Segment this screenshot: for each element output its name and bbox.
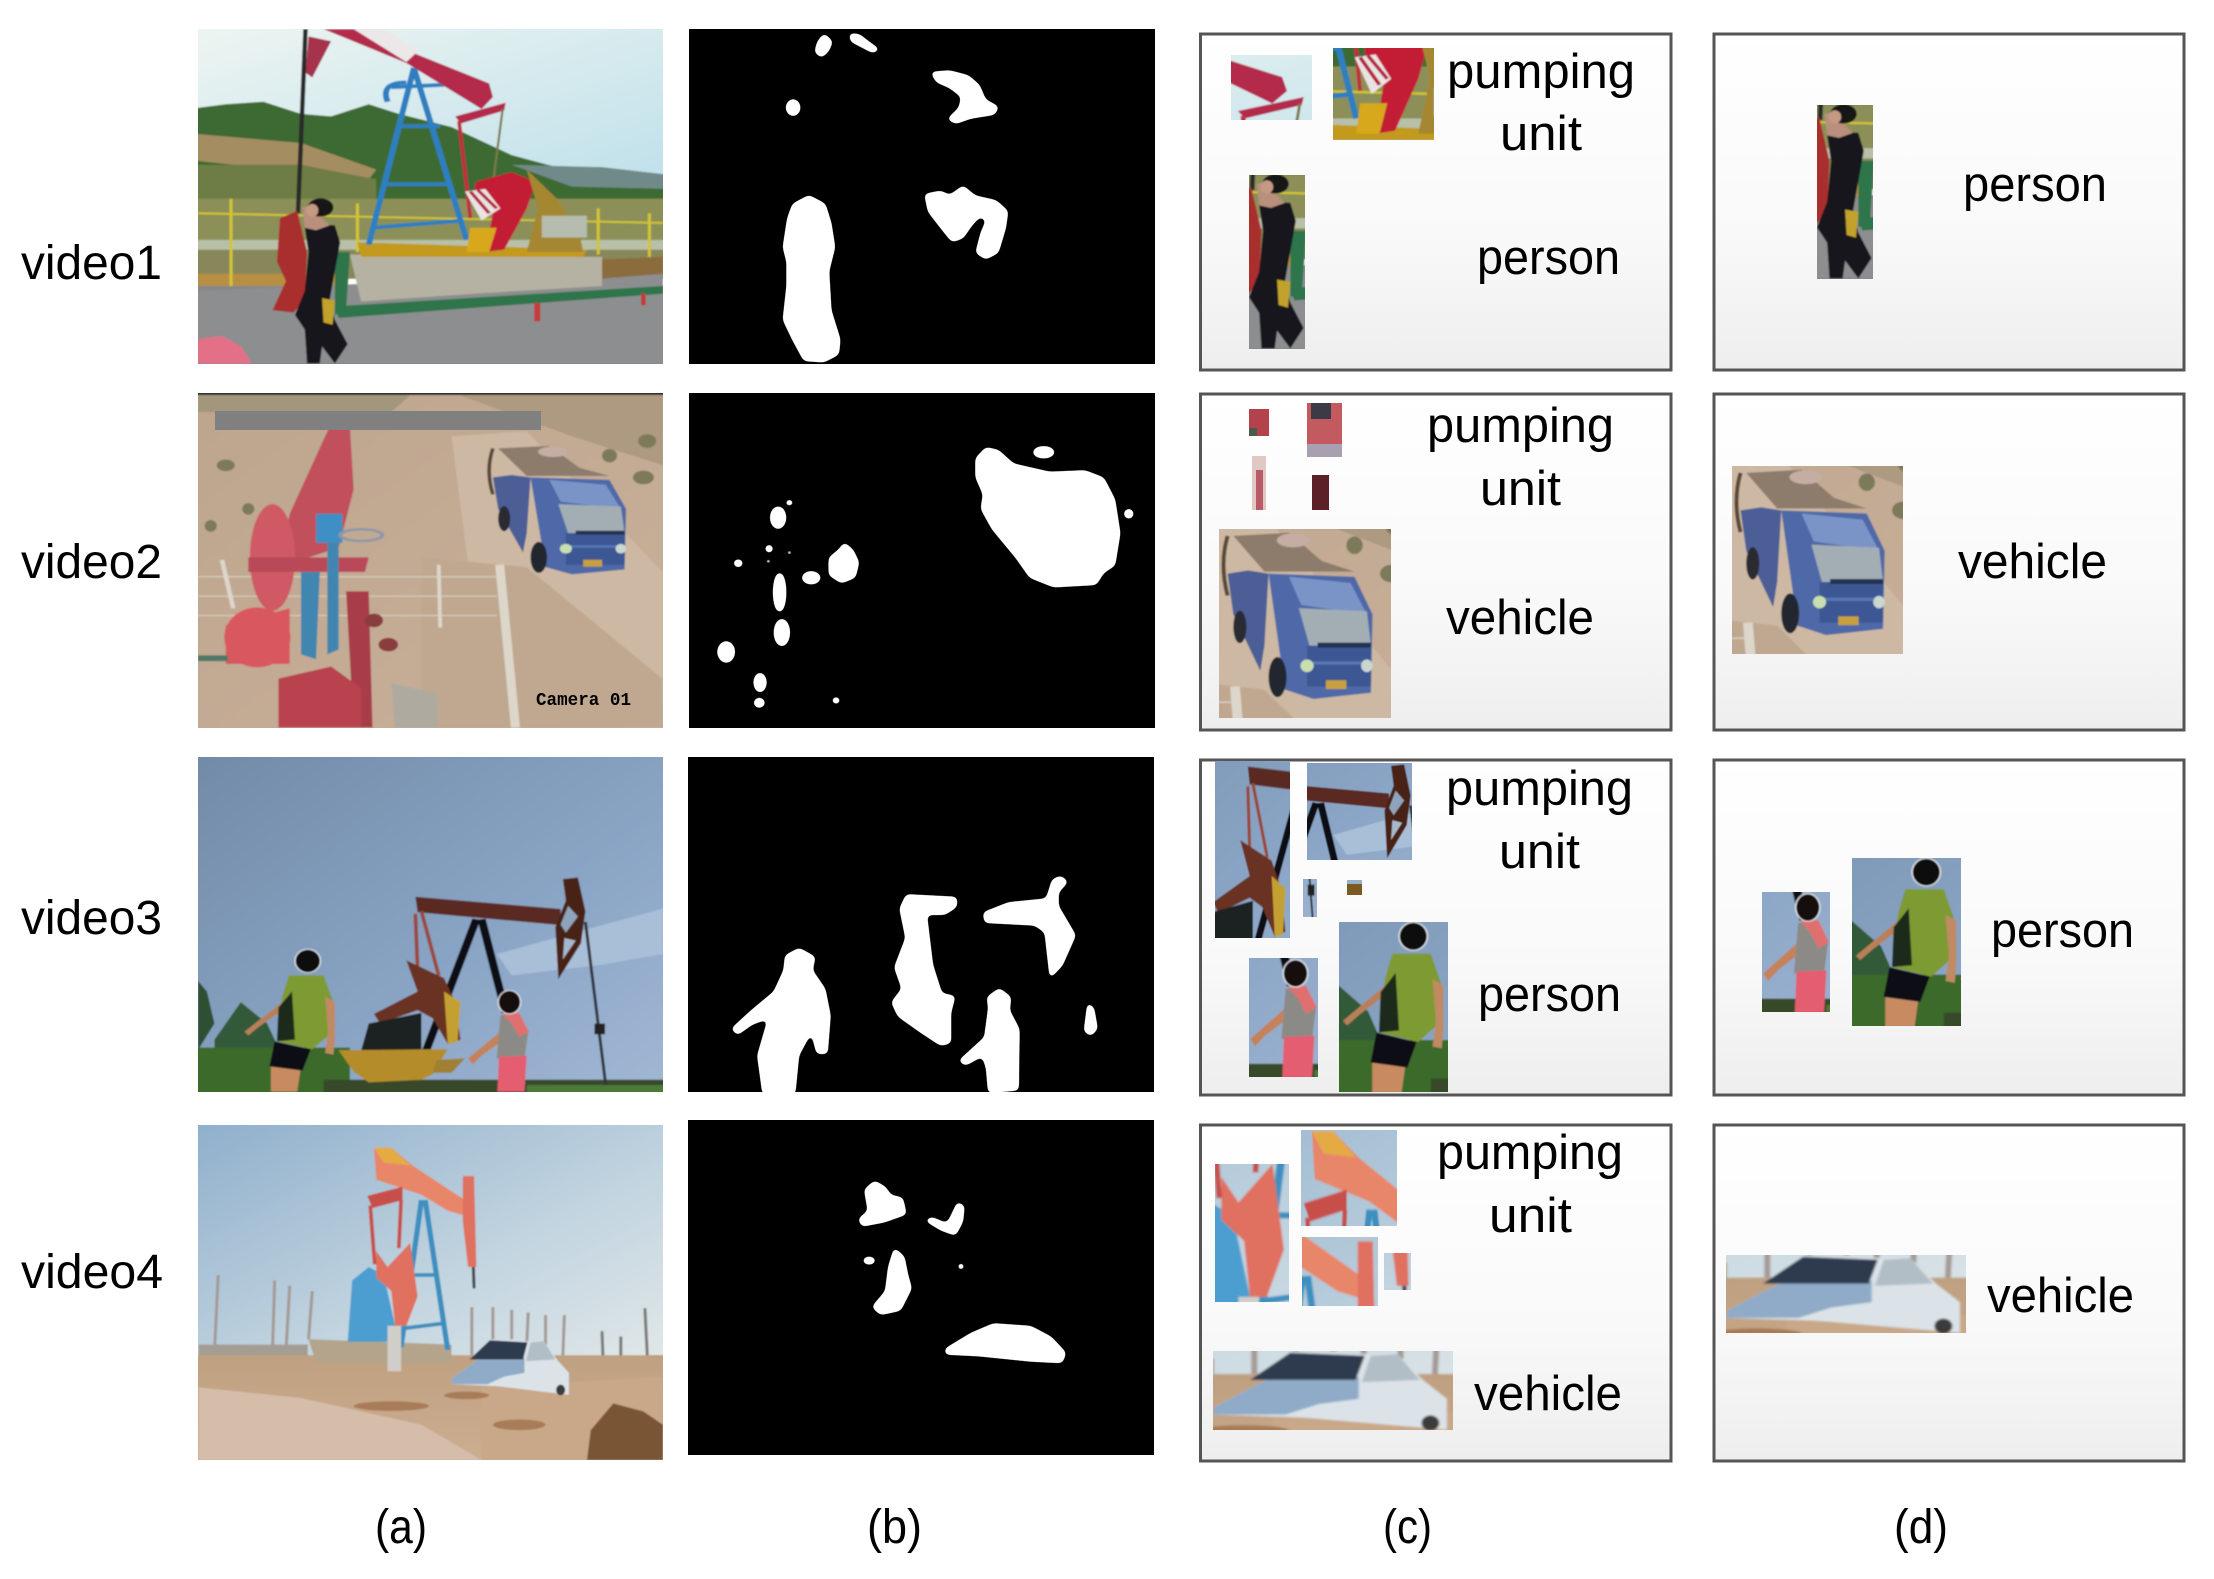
text: pumping unit bbox=[1446, 762, 1633, 879]
photo: video3 frame bbox=[198, 757, 663, 1092]
crop: walking beam and crank bbox=[1215, 761, 1290, 938]
caption (b): (b) bbox=[867, 1501, 922, 1554]
crop: child bbox=[1762, 892, 1830, 1012]
text: person: person bbox=[1963, 158, 2107, 212]
column d row 3 panel bbox=[1461, 612, 2214, 1095]
photo: video4 frame bbox=[198, 1125, 663, 1460]
crop: pumping unit gearbox bbox=[1333, 48, 1434, 140]
text: pumping unit: unit bbox=[1480, 462, 1561, 516]
photo: video1 frame bbox=[198, 29, 663, 364]
label: video4: video4 bbox=[21, 1246, 163, 1299]
text: pumping unit: pumping bbox=[1446, 762, 1633, 816]
photo: video2 frame bbox=[188, 388, 673, 734]
crop: beam left bbox=[1301, 1130, 1397, 1226]
text: person: person bbox=[1477, 231, 1620, 285]
text: vehicle: vehicle bbox=[1474, 1367, 1622, 1421]
crop: polished rod bbox=[1303, 879, 1317, 917]
caption (a): (a) bbox=[375, 1501, 427, 1554]
crop: car bbox=[1213, 1351, 1453, 1430]
column captions bbox=[375, 1501, 1948, 1554]
crop: truck bbox=[1219, 529, 1391, 718]
crop: small fragment bbox=[1347, 880, 1362, 895]
text: pumping unit: unit bbox=[1500, 107, 1582, 161]
blobs: video3 mask bbox=[731, 875, 1098, 1094]
crop: person bbox=[1249, 175, 1305, 349]
label: video3: video3 bbox=[21, 892, 162, 945]
crop: pump fragment 4 bbox=[1312, 475, 1329, 510]
column c row 3 panel bbox=[944, 598, 1820, 1101]
text: vehicle: vehicle bbox=[1987, 1269, 2134, 1323]
crop: car bbox=[1726, 1255, 1966, 1333]
label: video1: video1 bbox=[21, 237, 162, 290]
text: pumping unit bbox=[1427, 399, 1614, 516]
label: video2: video2 bbox=[21, 536, 162, 589]
text: pumping unit: unit bbox=[1499, 825, 1580, 879]
photo: video2 frame: Camera 01 bbox=[536, 691, 631, 711]
text: vehicle: vehicle bbox=[1446, 591, 1594, 645]
mask background panels bbox=[688, 29, 1155, 1455]
crop: counterweight bbox=[1215, 1164, 1289, 1302]
crop: pumping unit beam bbox=[1231, 55, 1312, 120]
text: pumping unit: pumping bbox=[1437, 1126, 1623, 1180]
blobs: video4 mask bbox=[858, 1180, 1066, 1363]
column c row 1 panel bbox=[889, 0, 1671, 374]
column c row 2 panel bbox=[896, 394, 1671, 906]
blobs: video2 mask bbox=[717, 446, 1134, 708]
text: pumping unit: unit bbox=[1489, 1189, 1572, 1243]
column c row 4 panel bbox=[692, 966, 1689, 1537]
crop: pump fragment 1 bbox=[1249, 409, 1269, 436]
crop: pump fragment 2 bbox=[1307, 403, 1342, 457]
crop: horse head bbox=[1307, 763, 1412, 860]
column b: foreground masks bbox=[688, 29, 1155, 1455]
crop: truck bbox=[1732, 466, 1903, 654]
crop: child bbox=[1249, 958, 1318, 1077]
crop: horse head fragment bbox=[1384, 1253, 1411, 1290]
text: person: person bbox=[1991, 904, 2134, 958]
text: pumping unit: pumping bbox=[1427, 399, 1614, 453]
text: pumping unit bbox=[1447, 45, 1635, 161]
text: pumping unit bbox=[1437, 1126, 1623, 1243]
text: vehicle: vehicle bbox=[1958, 535, 2107, 589]
column d row 2 panel bbox=[1411, 394, 2184, 841]
text: person: person bbox=[1478, 968, 1621, 1022]
crop: beam right bbox=[1302, 1237, 1378, 1306]
mask blobs bbox=[717, 33, 1134, 1363]
caption (c): (c) bbox=[1383, 1501, 1432, 1554]
column a: video frames bbox=[188, 24, 673, 1468]
crop: man in green shirt bbox=[1339, 922, 1448, 1092]
column d row 4 panel bbox=[1205, 950, 2184, 1461]
caption (d): (d) bbox=[1894, 1501, 1948, 1554]
crop: person bbox=[1817, 105, 1873, 279]
text: pumping unit: pumping bbox=[1447, 45, 1635, 99]
column d row 1 panel bbox=[1706, 0, 2210, 370]
blobs: video1 mask bbox=[783, 33, 1008, 363]
crop: pump fragment 3 bbox=[1252, 456, 1266, 510]
crop: man in green shirt bbox=[1852, 858, 1961, 1026]
row labels bbox=[21, 237, 163, 1299]
